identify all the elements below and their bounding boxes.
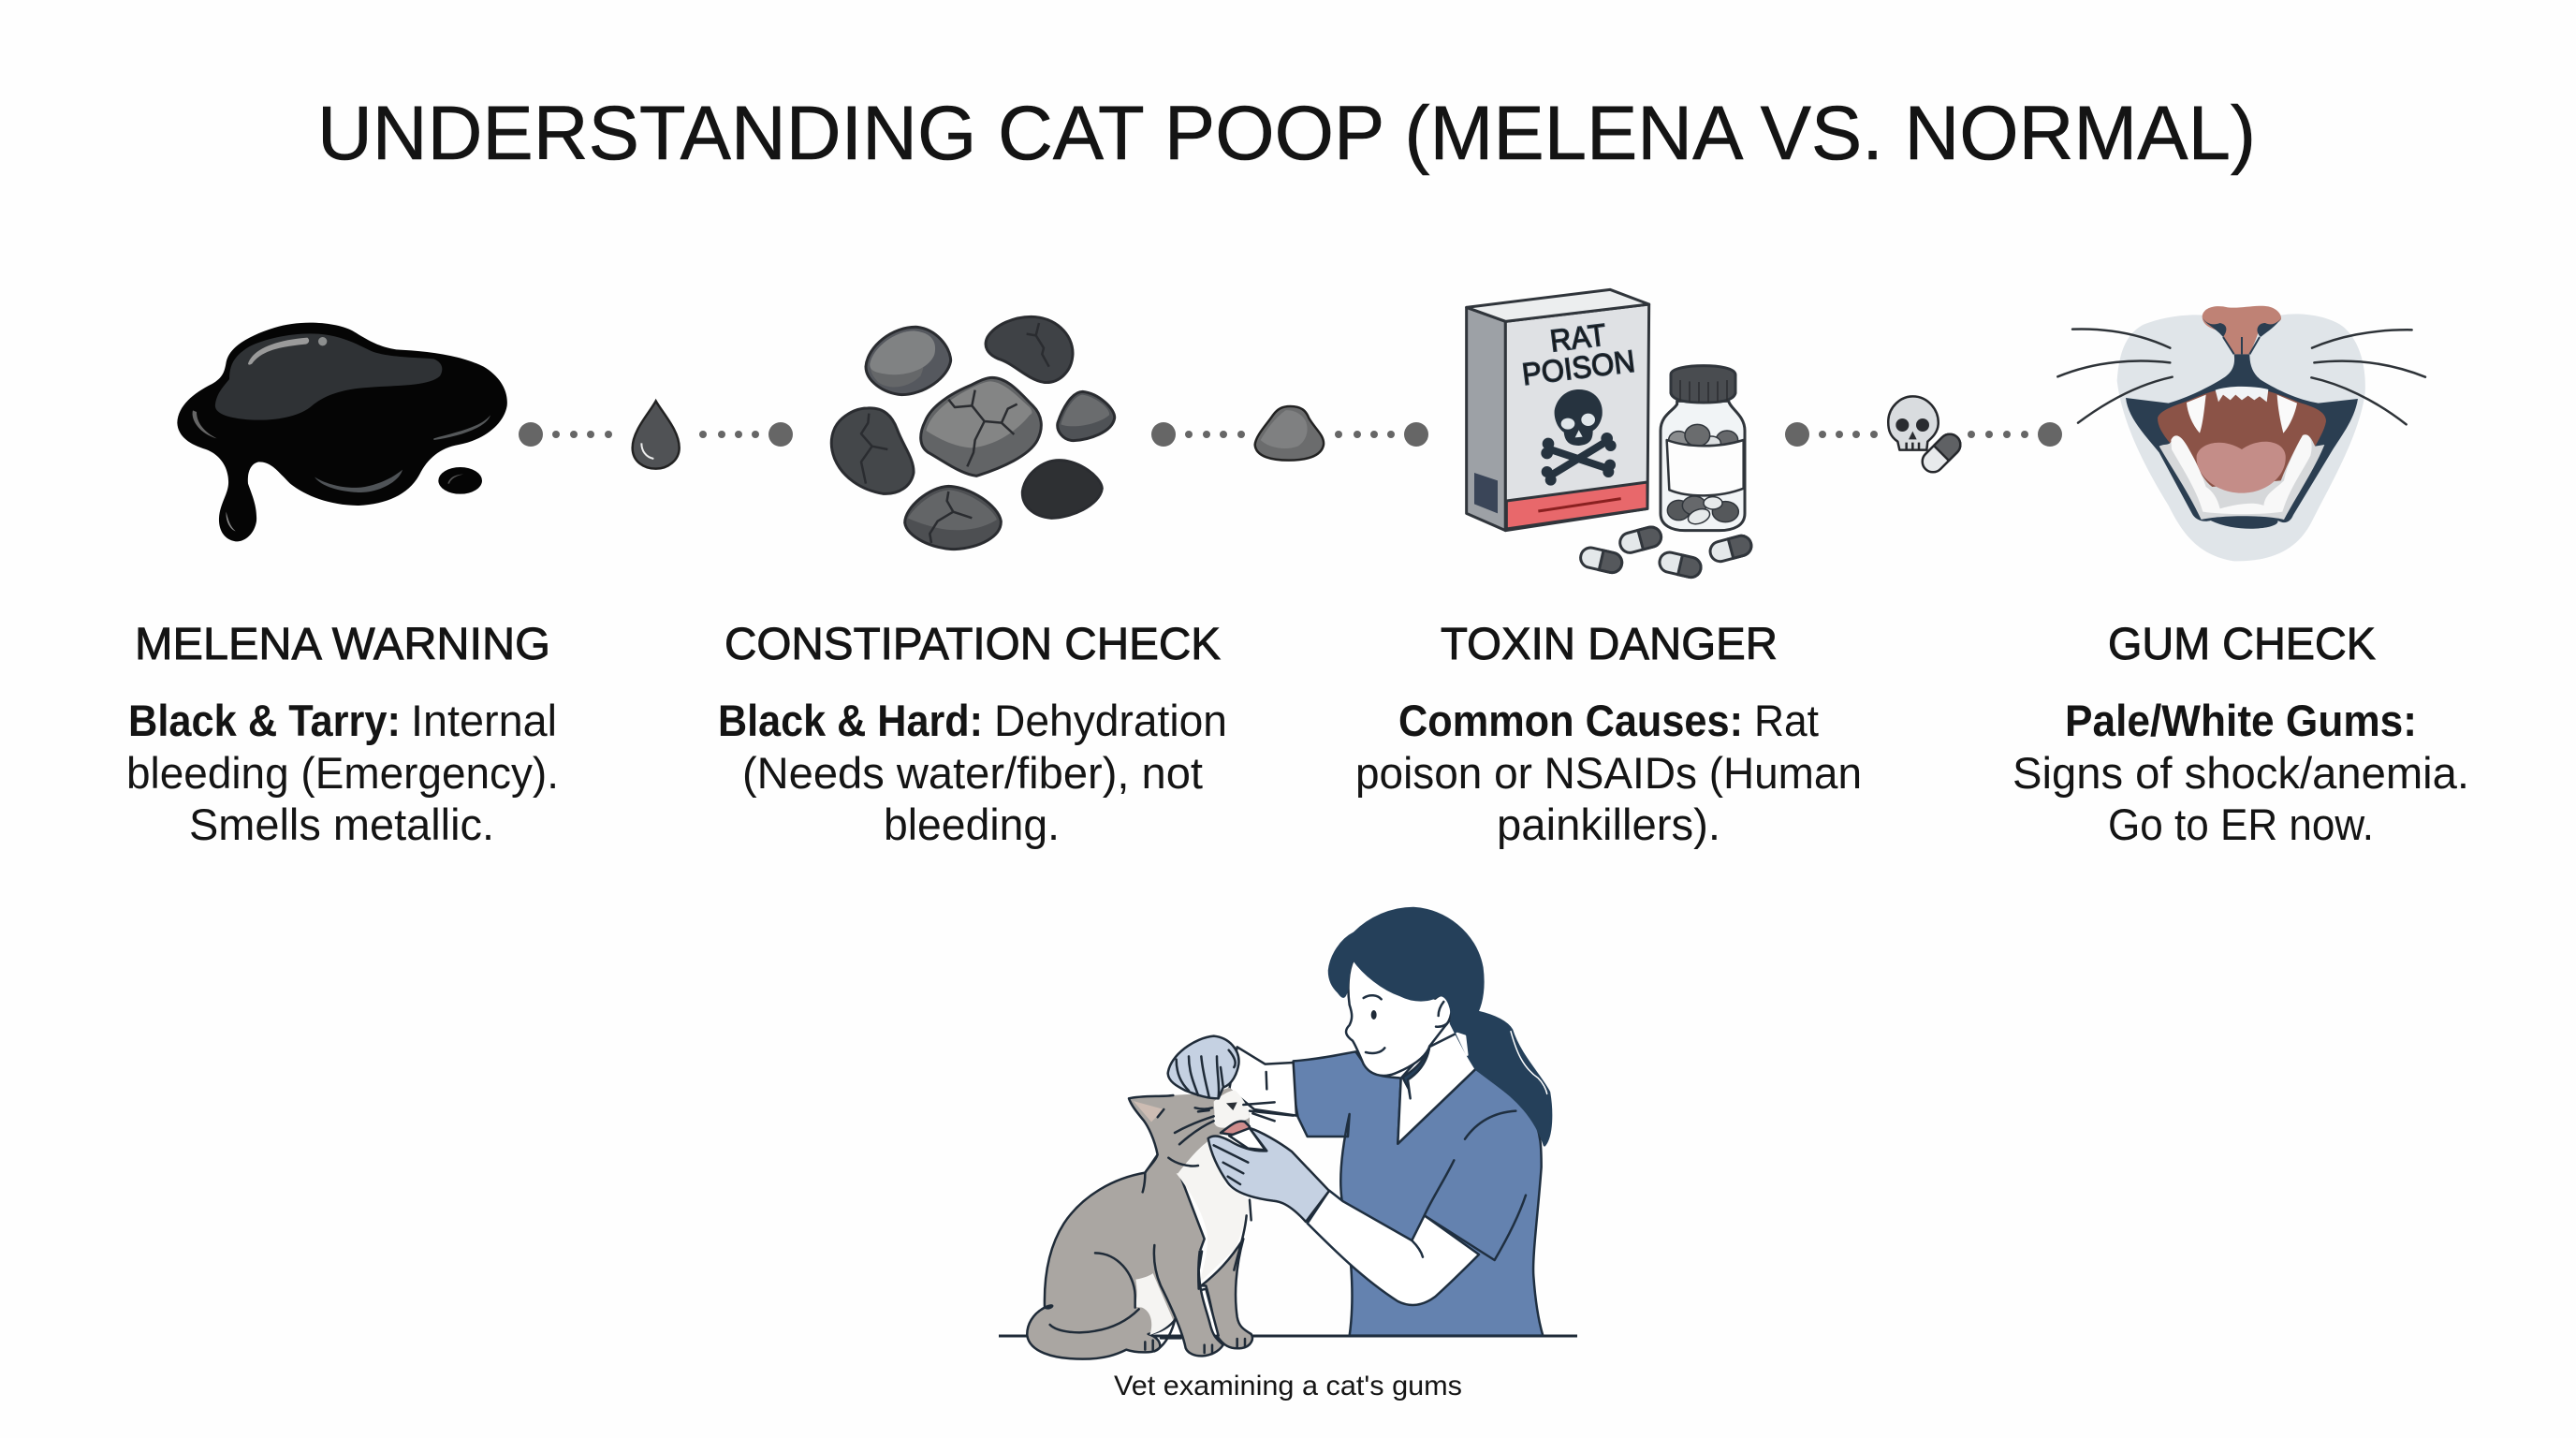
- body text: bleeding (Emergency).: [126, 748, 559, 798]
- icon: hard dry stools: [831, 316, 1115, 550]
- body text: Smells metallic.: [189, 800, 494, 849]
- body text: painkillers).: [1497, 800, 1720, 849]
- body text: Dehydration: [994, 696, 1227, 745]
- body text: [718, 696, 1227, 849]
- body text: Black & Tarry:: [128, 696, 401, 745]
- icon: small stone: [1255, 406, 1324, 461]
- body text: [126, 696, 559, 849]
- vet: [1293, 908, 1551, 1336]
- heading: CONSTIPATION CHECK: [724, 620, 1221, 669]
- bottom glove: [1208, 1128, 1329, 1222]
- body text: (Needs water/fiber), not: [742, 748, 1203, 798]
- column: gum check: [2012, 620, 2469, 849]
- body text: [1355, 696, 1862, 849]
- body text: Internal: [411, 696, 557, 745]
- body text: Signs of shock/anemia.: [2012, 748, 2469, 798]
- body text: bleeding.: [884, 800, 1060, 849]
- illustration: vet examining cat: [999, 908, 1577, 1359]
- connector: constipation to toxin: [1151, 422, 1428, 447]
- icon: skull and capsule: [1888, 396, 1965, 477]
- icon: melena tar puddle: [177, 323, 507, 541]
- body text: poison or NSAIDs (Human: [1355, 748, 1862, 798]
- body text: Black & Hard:: [718, 696, 983, 745]
- caption: Vet examining a cat's gums: [1114, 1371, 1462, 1401]
- body text: [2012, 696, 2469, 849]
- connector: toxin to gums: [1785, 422, 2062, 447]
- heading: TOXIN DANGER: [1441, 620, 1778, 669]
- box label: POISON: [1520, 344, 1637, 391]
- loose capsules: [1579, 525, 1753, 580]
- column: toxin danger: [1355, 620, 1862, 849]
- whiskers: [2057, 329, 2425, 424]
- cat: [1027, 1036, 1329, 1359]
- box label: RAT: [1548, 316, 1608, 359]
- icon: open cat mouth with pale gums: [2057, 306, 2425, 561]
- box: [1467, 289, 1649, 531]
- title: UNDERSTANDING CAT POOP (MELENA VS. NORMAL): [317, 91, 2256, 176]
- body text: Common Causes:: [1398, 696, 1743, 745]
- table line: [999, 1335, 1577, 1337]
- heading: MELENA WARNING: [135, 620, 550, 669]
- connector: melena to constipation: [519, 422, 793, 447]
- column: melena warning: [126, 620, 559, 849]
- icon: rat poison box and pill bottle: [1467, 289, 1753, 580]
- icon: small drop: [633, 401, 680, 469]
- mouth: [2126, 354, 2358, 529]
- top glove: [1168, 1036, 1238, 1098]
- column: constipation check: [718, 620, 1227, 849]
- box label: [1520, 316, 1637, 391]
- body text: Rat: [1754, 696, 1819, 745]
- heading: GUM CHECK: [2108, 620, 2376, 669]
- body text: Pale/White Gums:: [2065, 696, 2417, 745]
- bottle: [1661, 366, 1745, 531]
- body text: Go to ER now.: [2108, 800, 2374, 849]
- vet forearm: [1229, 1047, 1296, 1116]
